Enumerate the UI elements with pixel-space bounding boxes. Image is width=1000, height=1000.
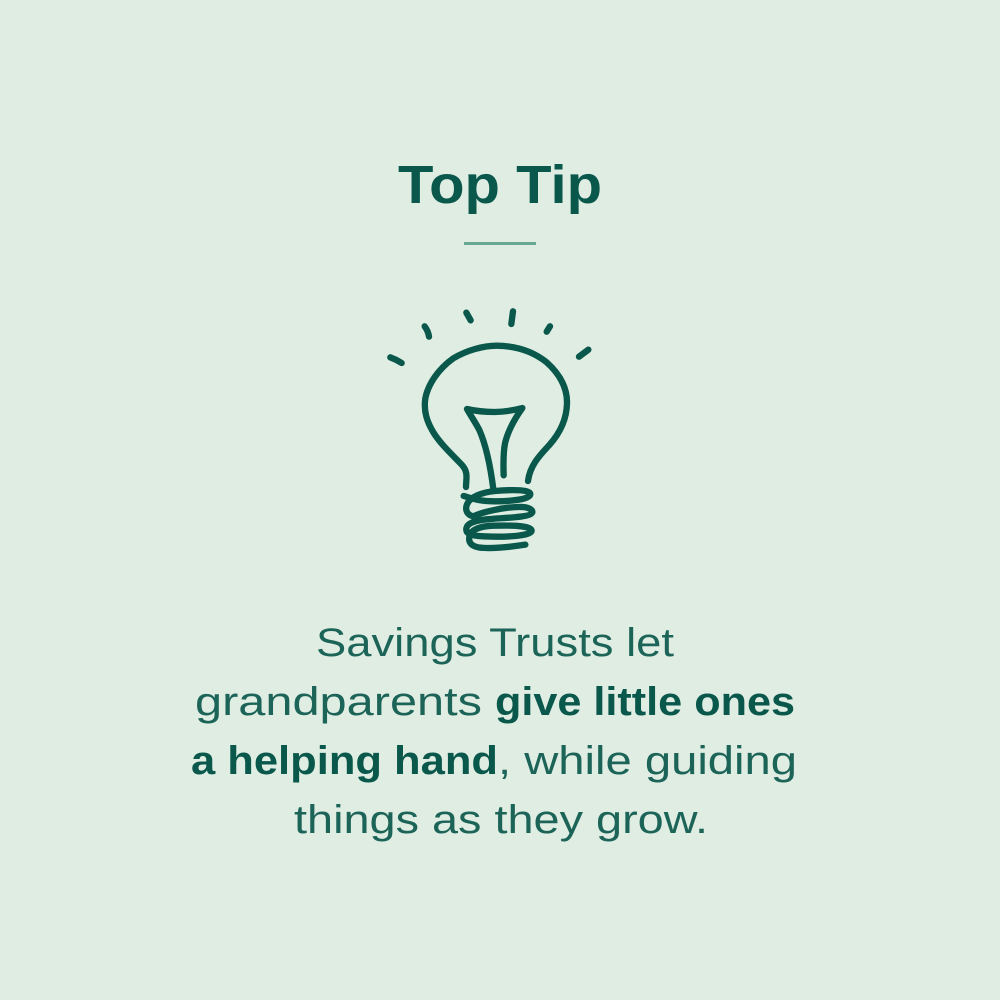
title underline [464, 242, 536, 245]
body text [191, 621, 797, 842]
body text: Savings Trusts let [316, 621, 674, 665]
icon: rays [390, 311, 588, 363]
icon: light bulb [390, 311, 588, 548]
title: Top Tip [398, 155, 602, 215]
body text: a helping hand [191, 739, 498, 783]
icon: screw base [464, 490, 532, 548]
body text: grandparents [195, 680, 482, 724]
body text: things as they grow. [294, 798, 708, 842]
icon: bulb glass [425, 346, 567, 487]
body text: give little ones [495, 680, 795, 724]
body text: , while guiding [498, 739, 797, 783]
icon: filament [467, 408, 522, 489]
